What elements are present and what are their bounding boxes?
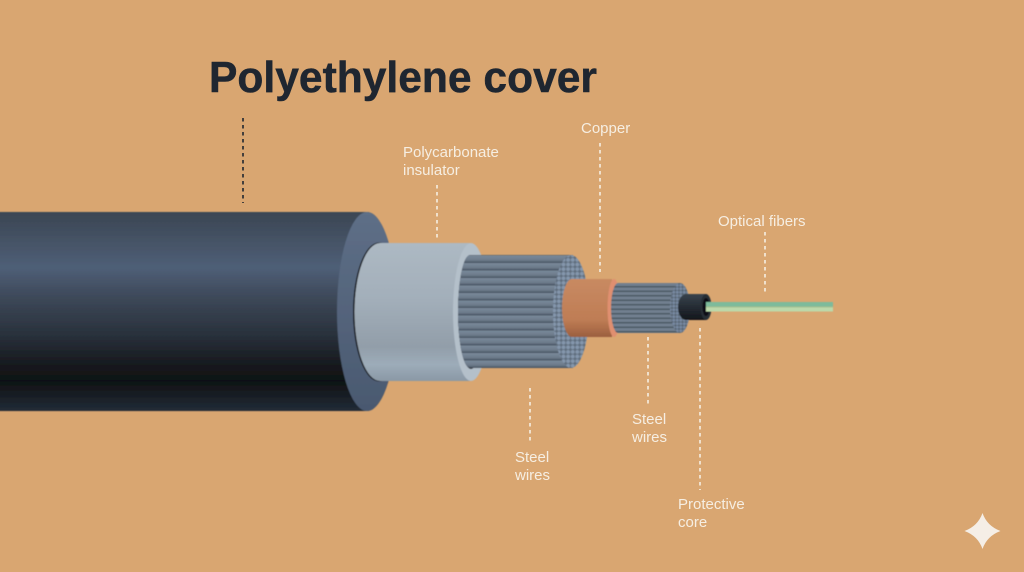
label: outer steel wires: Steel	[515, 449, 549, 466]
leader: polyethylene cover	[242, 118, 244, 203]
label: inner steel wires: wires	[631, 429, 667, 446]
label: polycarbonate insulator: Polycarbonate	[403, 144, 499, 161]
leader: polycarbonate insulator	[436, 185, 438, 240]
cable illustration	[0, 212, 833, 411]
leader: inner steel wires	[647, 337, 649, 404]
leader: copper	[599, 143, 601, 272]
copper layer	[562, 279, 620, 337]
title: Polyethylene cover	[209, 53, 597, 102]
label: polycarbonate insulator: insulator	[403, 162, 460, 179]
optical fibers	[706, 302, 833, 312]
leader: protective core	[699, 328, 701, 490]
label: optical fibers: Optical fibers	[718, 213, 806, 230]
label: outer steel wires: wires	[514, 467, 550, 484]
label: protective core: Protective	[678, 496, 745, 513]
steel wires inner bundle	[611, 283, 690, 333]
label: inner steel wires: Steel	[632, 411, 666, 428]
leader: outer steel wires	[529, 388, 531, 443]
icon: sparkle	[964, 513, 1000, 549]
label: copper: Copper	[581, 120, 630, 137]
polyethylene jacket	[0, 212, 405, 411]
leader: optical fibers	[764, 232, 766, 293]
protective core	[678, 294, 712, 320]
polycarbonate insulator	[355, 243, 489, 381]
steel wires outer bundle	[455, 255, 589, 368]
label: protective core: core	[678, 514, 707, 531]
